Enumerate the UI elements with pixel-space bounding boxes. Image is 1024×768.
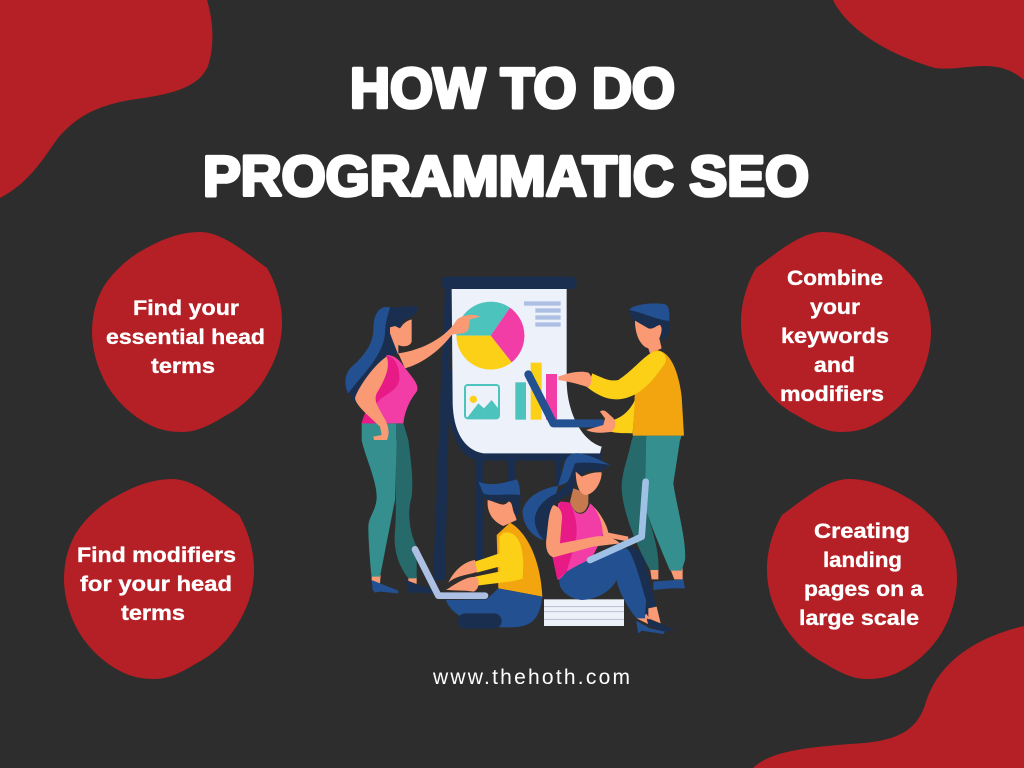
title: HOW TO DO [350, 56, 675, 120]
corner blob: top left [0, 0, 212, 198]
title: PROGRAMMATIC SEO [203, 144, 809, 208]
callout: combine keywords: modifiers [780, 383, 884, 406]
callout: landing pages: pages on a [804, 578, 923, 601]
stack of books [544, 599, 624, 626]
illustration: team around presentation board [345, 277, 685, 634]
callout: find head terms: Find your [133, 297, 239, 320]
bar chart [515, 363, 557, 420]
callout: landing pages: large scale [799, 607, 919, 630]
corner blob: top right [833, 0, 1024, 80]
callout: combine keywords: your [810, 296, 860, 319]
callout: find head terms [92, 232, 282, 432]
callout: landing pages [767, 479, 957, 679]
board frame curve [446, 370, 602, 461]
man standing [528, 303, 684, 441]
image icon [465, 385, 499, 418]
woman standing [345, 306, 480, 444]
callout: combine keywords: Combine [787, 267, 883, 290]
callout: find modifiers: for your head [80, 573, 232, 596]
corner blob: bottom right [753, 626, 1024, 768]
board top bar [441, 277, 577, 289]
title [203, 56, 809, 208]
callout: landing pages: Creating [814, 520, 910, 543]
board paper [452, 289, 602, 453]
callout: landing pages: landing [823, 549, 902, 572]
woman standing legs [362, 440, 433, 593]
seated man [415, 479, 542, 629]
man standing legs [622, 440, 685, 590]
callout: combine keywords: keywords [781, 325, 889, 348]
seated woman [523, 453, 675, 634]
callout: combine keywords [741, 232, 931, 432]
footer url: www.thehoth.com [432, 666, 630, 689]
callout: find modifiers: terms [121, 602, 185, 625]
board stand [433, 287, 562, 580]
callout: find head terms: terms [151, 355, 215, 378]
callout: find head terms: essential head [106, 326, 265, 349]
callout: find modifiers [64, 479, 254, 679]
callout: find modifiers: Find modifiers [77, 544, 236, 567]
callout: combine keywords: and [814, 354, 855, 377]
legend lines [524, 301, 561, 327]
pie chart [456, 302, 524, 370]
